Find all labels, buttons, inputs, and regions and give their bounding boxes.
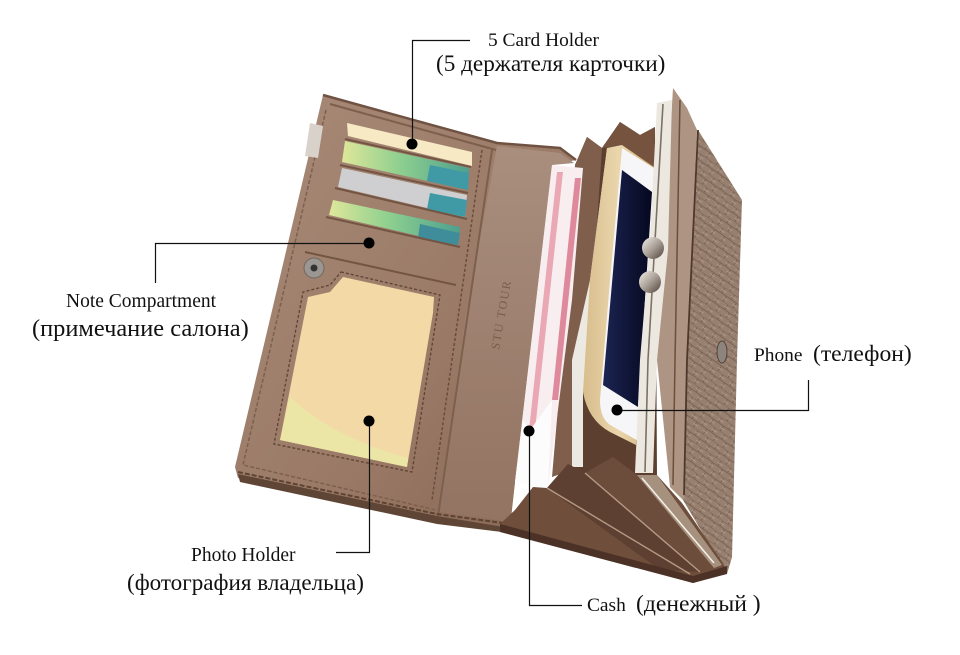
icon: snap button <box>304 258 324 278</box>
callout: note compartment: (примечание салона) <box>32 315 249 342</box>
callout: 5 card holder: 5 Card Holder <box>488 30 599 51</box>
callout: photo holder: (фотография владельца) <box>127 569 364 595</box>
callout: 5 card holder: (5 держателя карточки) <box>436 51 665 77</box>
panel: inner gusset behind phone <box>552 122 657 480</box>
callout: phone: (телефон) <box>813 341 912 367</box>
wallet photo <box>235 88 742 583</box>
icon: flap button <box>717 341 727 363</box>
callout: cash: (денежный ) <box>636 591 761 617</box>
panel: phone <box>583 145 654 445</box>
callout: photo holder: Photo Holder <box>191 545 296 566</box>
callout: cash <box>524 426 761 617</box>
icon: clasp balls <box>642 237 664 259</box>
panel: left wallet leaf <box>235 95 576 533</box>
panel: metal frame with clasp <box>635 88 698 500</box>
panel: photo window <box>274 272 440 472</box>
panel: cash banknotes <box>515 165 583 488</box>
text: embossed brand: STU TOUR <box>488 278 514 351</box>
panel: accordion fan pockets <box>500 457 727 583</box>
callout: photo holder <box>127 416 374 595</box>
panel: card slots <box>305 123 472 285</box>
callout: note compartment: Note Compartment <box>66 291 217 312</box>
panel: croc outer flap <box>683 130 742 574</box>
callout: 5 card holder <box>406 30 665 150</box>
callout: phone: Phone <box>754 345 802 366</box>
icon: metal tab <box>305 123 323 158</box>
callout: phone <box>612 341 912 416</box>
callout: cash: Cash <box>587 595 626 616</box>
panel: white card sleeve <box>572 148 612 467</box>
callout: note compartment <box>32 238 374 342</box>
